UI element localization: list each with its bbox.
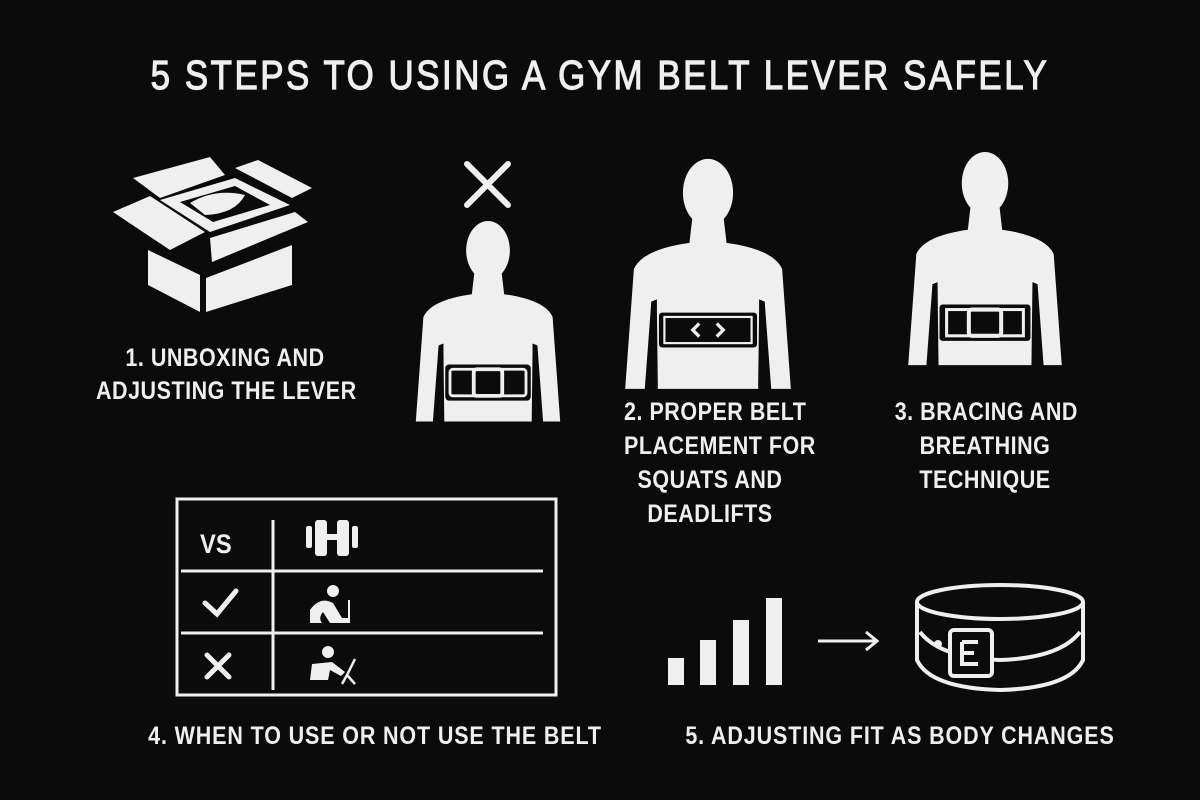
label 3 (895, 398, 1078, 494)
label 2: SQUATS AND (638, 466, 782, 494)
label 1: ADJUSTING THE LEVER (96, 376, 357, 404)
label 3: BREATHING (920, 432, 1050, 460)
label 3: 3. BRACING AND (895, 398, 1078, 426)
icon: open box (113, 157, 312, 312)
figure 2 with belt (625, 159, 791, 389)
label 3: TECHNIQUE (919, 466, 1051, 494)
title: 5 STEPS TO USING A GYM BELT LEVER SAFELY (151, 52, 1049, 98)
icon: person bad lift (310, 646, 355, 684)
icon: cross (207, 655, 229, 677)
label 1 (96, 344, 357, 404)
label 4: 4. WHEN TO USE OR NOT USE THE BELT (148, 722, 602, 750)
figure 3 with belt (908, 152, 1062, 365)
bar chart (668, 598, 782, 685)
icon: belt (917, 585, 1083, 690)
icon: check (205, 591, 236, 614)
icon: person lifting (310, 585, 350, 623)
icon: dumbbell (306, 520, 358, 556)
label 2: PLACEMENT FOR (624, 432, 816, 460)
label 1: 1. UNBOXING AND (125, 344, 325, 372)
icon: cross mark (467, 164, 508, 205)
label 2: DEADLIFTS (647, 500, 773, 528)
arrow (818, 632, 877, 650)
vs label: VS (200, 530, 232, 559)
figure 1 with belt (416, 221, 560, 422)
label 2 (624, 398, 816, 528)
label 5: 5. ADJUSTING FIT AS BODY CHANGES (685, 722, 1115, 750)
table: when to use (177, 499, 556, 695)
label 2: 2. PROPER BELT (624, 398, 806, 426)
